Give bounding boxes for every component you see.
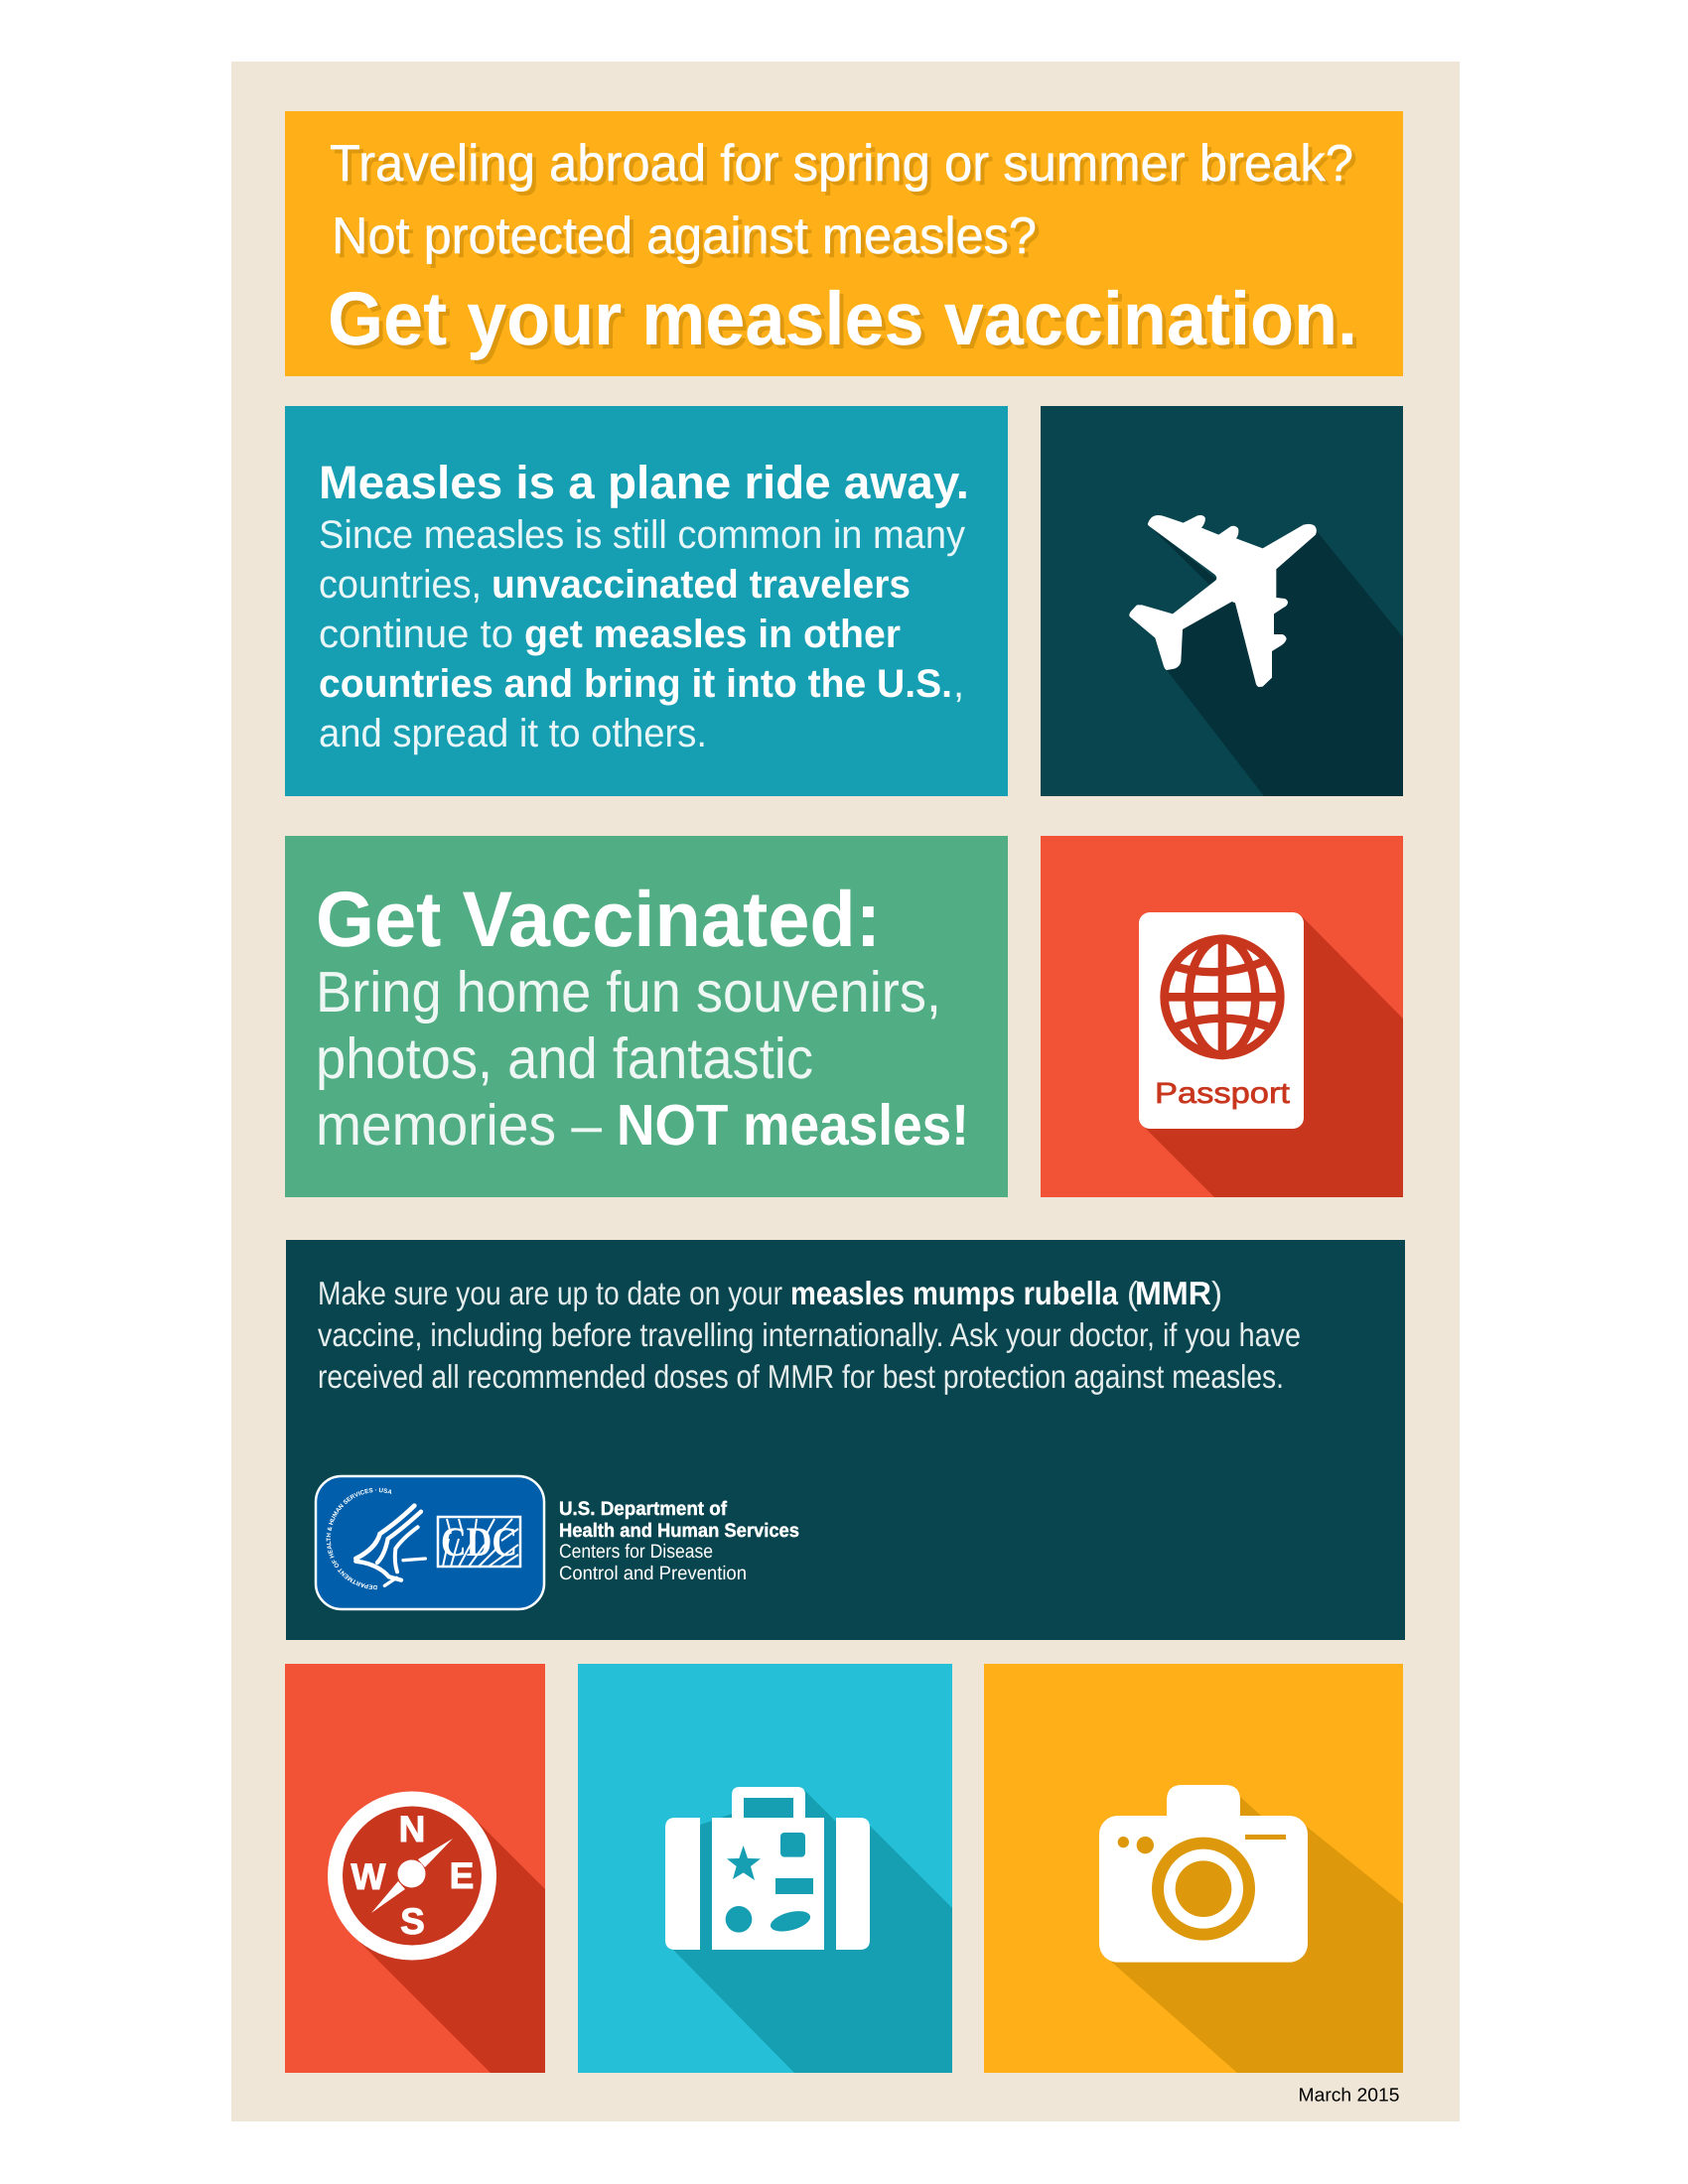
- title text: Not protected against measles?: [332, 207, 1037, 265]
- icon shadow: plane: [1149, 525, 1403, 796]
- body text: souvenirs: [316, 960, 969, 1158]
- logo text: department names: Centers for Disease: [559, 1541, 713, 1563]
- body text: travelers: continue to: [319, 613, 513, 656]
- body text: souvenirs: NOT measles!: [617, 1093, 969, 1158]
- icon shadow: passport: [1142, 914, 1403, 1197]
- body text: travelers: [319, 513, 965, 755]
- panel: compass icon: [285, 1664, 545, 2073]
- logo: HHS seal ring text: DEPARTMENT OF HEALTH & HUMAN SERVICES · USA: [326, 1487, 391, 1590]
- body text: travelers: ,: [953, 662, 964, 706]
- logo text: department names: U.S. Department of: [559, 1498, 727, 1520]
- body text: souvenirs: memories –: [316, 1093, 603, 1158]
- panel: passport icon: [1041, 836, 1403, 1197]
- logo text: department names: Health and Human Services: [559, 1520, 799, 1542]
- body text: MMR advice: vaccine, including before travelling internationally. Ask your doctor, if you have: [318, 1316, 1301, 1353]
- title text: [328, 135, 1357, 361]
- panel: camera icon: [984, 1664, 1403, 2073]
- panel: get vaccinated: [285, 836, 1008, 1197]
- body text: travelers: unvaccinated travelers: [492, 563, 911, 607]
- body text: souvenirs: photos, and fantastic: [316, 1026, 813, 1091]
- body text: travelers: countries,: [319, 563, 482, 607]
- body text: MMR advice: (: [1127, 1275, 1138, 1311]
- label: passport: Passport: [1155, 1077, 1290, 1110]
- body text: MMR advice: received all recommended doses of MMR for best protection against measles.: [318, 1358, 1284, 1395]
- body text: MMR advice: MMR: [1135, 1275, 1211, 1311]
- icon shadow: camera: [1110, 1795, 1403, 2073]
- icon shadow: compass: [352, 1816, 545, 2073]
- logo: CDC box: CDC: [441, 1520, 517, 1566]
- icon: airplane: [1129, 515, 1317, 687]
- icon: passport card: [1139, 912, 1304, 1129]
- logo text: department names: Control and Prevention: [559, 1563, 747, 1584]
- logo: HHS and CDC badge: [314, 1475, 546, 1610]
- icon: compass: S: [400, 1901, 425, 1942]
- logo text: department names: [559, 1498, 799, 1584]
- body text: travelers: countries and bring it into the U.S.: [319, 662, 952, 706]
- body text: travelers: get measles in other: [524, 613, 901, 656]
- heading: get vaccinated: Get Vaccinated:: [316, 875, 881, 963]
- icon: suitcase: [665, 1787, 870, 1950]
- body text: MMR advice: Make sure you are up to date on your: [318, 1275, 782, 1311]
- panel: title banner: [285, 111, 1403, 376]
- logo: HHS eagle: [355, 1506, 425, 1585]
- icon: globe: [1164, 939, 1281, 1055]
- icon: camera: [1099, 1785, 1308, 1963]
- icon: compass: E: [450, 1855, 474, 1896]
- panel: plane icon: [1041, 406, 1403, 796]
- icon: compass: N: [399, 1809, 425, 1849]
- body text: MMR advice: [318, 1275, 1301, 1395]
- body text: travelers: and spread it to others.: [319, 712, 707, 755]
- date footnote: March 2015: [1299, 2085, 1400, 2107]
- icon shadow: suitcase: [672, 1789, 952, 2073]
- body text: MMR advice: ): [1211, 1275, 1222, 1311]
- page background panel: [231, 62, 1460, 2121]
- panel: plane ride text: [285, 406, 1008, 796]
- panel: suitcase icon: [578, 1664, 952, 2073]
- heading: measles is a plane ride away: Measles is a plane ride away.: [319, 456, 969, 508]
- title text: Get your measles vaccination.: [328, 277, 1357, 361]
- icon: compass: W: [352, 1856, 386, 1897]
- panel: MMR advice and logo: [286, 1240, 1405, 1640]
- title text: Traveling abroad for spring or summer break?: [330, 135, 1353, 193]
- icon: compass: [328, 1791, 496, 1960]
- body text: MMR advice: measles mumps rubella: [790, 1275, 1119, 1311]
- body text: souvenirs: Bring home fun souvenirs,: [316, 960, 941, 1024]
- body text: travelers: Since measles is still common in many: [319, 513, 965, 557]
